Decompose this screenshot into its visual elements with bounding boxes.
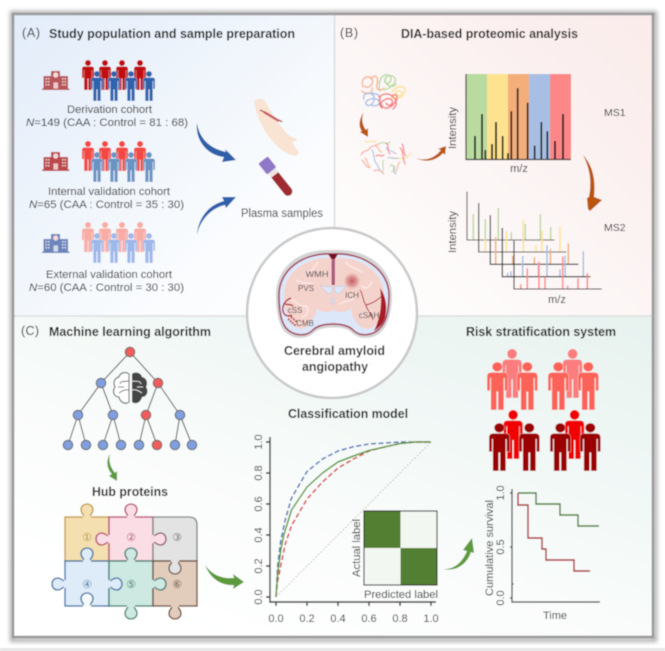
chart: MS2 stacked spectra: m/z (548, 294, 566, 306)
external validation cohort: External validation cohort (46, 269, 172, 281)
icon: arm with syringe (254, 99, 299, 156)
icon: brain (114, 373, 147, 403)
chart: ROC curves: 1.0 (253, 434, 265, 450)
arrow: blue up (197, 197, 236, 235)
icon: brain cross-section: PVS (298, 284, 314, 293)
label: hub proteins: Hub proteins (92, 484, 168, 499)
center title (284, 343, 385, 374)
chart: ROC curves: 0.2 (299, 613, 315, 625)
label: risk stratification: Risk stratification system (466, 325, 616, 339)
panel A heading: (A) (22, 26, 40, 40)
panel: C machine learning and risk (14, 317, 653, 637)
diagram: puzzle of hub proteins: ④ (82, 578, 92, 591)
panel: A study population (14, 14, 334, 315)
chart: MS1 spectrum (447, 74, 571, 175)
confusion matrix: Actual label (351, 519, 363, 577)
derivation cohort (26, 60, 188, 129)
internal validation cohort: N=65 (CAA : Control = 35 : 30) (29, 199, 184, 211)
label: classification model: Classification model (288, 406, 408, 421)
chart: survival curves: Cumulative survival (484, 500, 496, 596)
chart: ROC curves: 1.0 (423, 613, 439, 625)
arrow: orange small down (360, 112, 368, 137)
diagram: puzzle of hub proteins: ⑥ (172, 578, 182, 591)
icon: unfolded peptides (361, 141, 412, 174)
chart: ROC curves (253, 434, 439, 625)
icon: blood tube (258, 156, 295, 199)
icon: folded proteins (362, 75, 405, 109)
chart: MS2 stacked spectra: Intensity (447, 210, 459, 253)
chart: ROC curves: 0.4 (253, 527, 265, 543)
diagram: decision tree (63, 347, 197, 450)
derivation cohort: N=149 (CAA : Control = 81 : 68) (26, 117, 188, 129)
chart: ROC curves: 0.8 (253, 465, 265, 481)
confusion matrix: Predicted label (364, 589, 438, 601)
diagram: puzzle of hub proteins (52, 504, 197, 619)
panel C heading: (C) (21, 324, 39, 338)
panel B heading: (B) (340, 26, 358, 40)
icon: brain cross-section (276, 250, 392, 338)
label: MS2: MS2 (604, 222, 626, 234)
icon: low risk people (487, 349, 599, 410)
confusion matrix (351, 511, 438, 601)
panel: B proteomic analysis (335, 14, 653, 315)
chart: survival curves: 1.0 (495, 485, 507, 501)
arrow: orange to MS1 (416, 146, 446, 161)
center circle: cerebral amyloid angiopathy (247, 228, 417, 398)
arrow: orange big down (583, 155, 602, 211)
derivation cohort: Derivation cohort (67, 104, 152, 116)
arrow: green down (107, 454, 117, 481)
panel B heading: DIA-based proteomic analysis (401, 27, 578, 41)
panel C heading: Machine learning algorithm (49, 325, 211, 339)
chart: ROC curves: 0.8 (392, 613, 408, 625)
chart: ROC curves: 0.2 (253, 558, 265, 574)
chart: survival curves: Time (543, 610, 567, 622)
icon: brain cross-section: CMB (296, 319, 314, 328)
icon: brain cross-section: cSS (288, 306, 302, 315)
arrow: green to risk (443, 538, 474, 570)
arrow: blue down (197, 123, 236, 162)
internal validation cohort (29, 141, 184, 211)
chart: MS2 stacked spectra (447, 192, 602, 306)
label: MS1: MS1 (604, 107, 626, 119)
chart: survival curves (484, 485, 600, 622)
chart: survival curves: 0.0 (495, 590, 507, 606)
panel A heading: Study population and sample preparation (49, 27, 295, 41)
arrow: green to classification (205, 565, 244, 589)
internal validation cohort: Internal validation cohort (48, 186, 170, 198)
center title: angiopathy (302, 359, 369, 374)
chart: ROC curves: 0.0 (253, 589, 265, 605)
chart: ROC curves: 0.6 (253, 496, 265, 512)
label: plasma samples: Plasma samples (241, 208, 323, 220)
diagram: puzzle of hub proteins: ③ (172, 531, 182, 544)
diagram: puzzle of hub proteins: ② (126, 531, 136, 544)
external validation cohort (29, 222, 184, 294)
chart: ROC curves: 0.4 (330, 613, 346, 625)
chart: MS1 spectrum: m/z (510, 163, 528, 175)
icon: brain cross-section: WMH (306, 270, 329, 279)
chart: ROC curves: 0.0 (268, 613, 284, 625)
external validation cohort: N=60 (CAA : Control = 30 : 30) (29, 282, 184, 294)
diagram: puzzle of hub proteins: ① (82, 531, 92, 544)
icon: brain cross-section: cSAH (359, 311, 379, 320)
icon: high risk people (489, 410, 601, 471)
center title: Cerebral amyloid (284, 343, 385, 358)
chart: ROC curves: 0.6 (361, 613, 377, 625)
icon: brain cross-section: ICH (345, 291, 359, 300)
diagram: puzzle of hub proteins: ⑤ (126, 578, 136, 591)
panel B heading (340, 26, 578, 41)
chart: MS1 spectrum: Intensity (447, 106, 459, 149)
chart: survival curves: 0.5 (495, 539, 507, 555)
